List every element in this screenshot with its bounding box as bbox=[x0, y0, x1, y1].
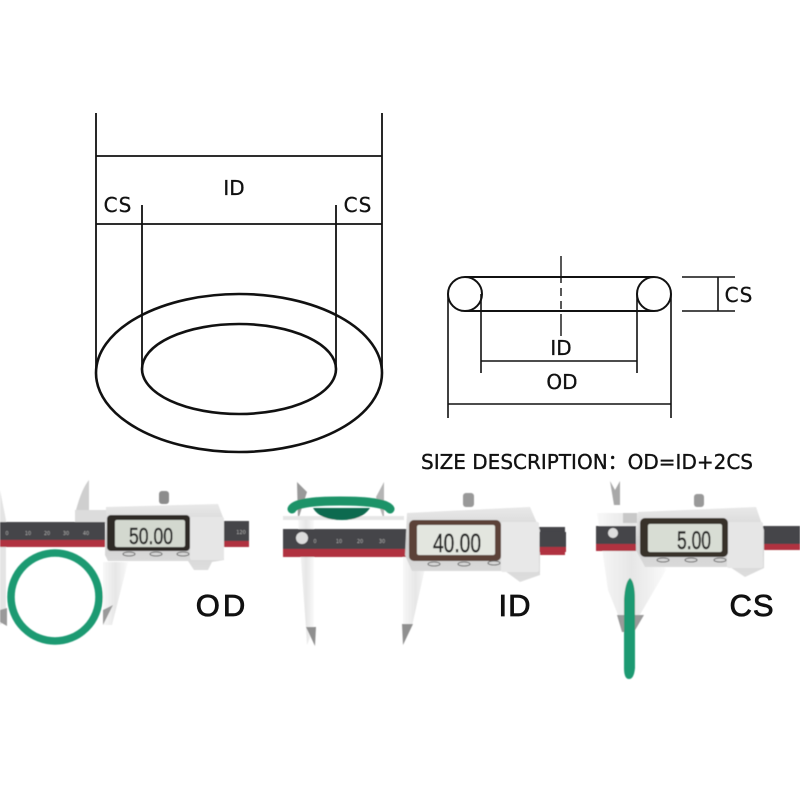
caliper body bbox=[405, 507, 540, 582]
CS dimension bbox=[682, 277, 735, 311]
scale bar bbox=[596, 526, 636, 544]
buttons bbox=[657, 558, 726, 562]
photo: OD caliper bbox=[0, 480, 249, 641]
diagram: large o-ring front view bbox=[96, 113, 382, 452]
dimension lines bbox=[96, 156, 382, 224]
label: left CS: CS bbox=[104, 193, 132, 217]
photo: OD caliper: 10 bbox=[25, 531, 31, 537]
photo: ID caliper: 0 bbox=[313, 539, 317, 545]
label: OD: OD bbox=[196, 588, 248, 623]
knob bbox=[463, 493, 474, 507]
photo: ID caliper: 20 bbox=[357, 539, 363, 545]
photo: CS caliper: 5.00 bbox=[677, 527, 711, 555]
dashed centre line bbox=[560, 256, 562, 336]
photo: OD caliper: 20 bbox=[44, 531, 50, 537]
left section circle bbox=[448, 277, 482, 311]
caliper body bbox=[105, 504, 224, 570]
green o-ring edge-on bbox=[624, 578, 635, 679]
label: side CS: CS bbox=[725, 283, 753, 307]
label: ID large diagram: ID bbox=[223, 176, 245, 200]
knob bbox=[159, 491, 169, 504]
label: side OD: OD bbox=[546, 370, 578, 394]
photo: OD caliper: 50.00 bbox=[129, 523, 173, 549]
scale bar bbox=[283, 529, 408, 549]
screen bbox=[640, 518, 728, 557]
label: side ID: ID bbox=[550, 336, 572, 360]
screen bbox=[409, 520, 501, 561]
outer ring ellipse bbox=[96, 294, 382, 452]
inner ring ellipse bbox=[142, 324, 336, 414]
jaws bbox=[610, 481, 620, 505]
photo: CS caliper bbox=[540, 481, 800, 679]
right section circle bbox=[637, 277, 671, 311]
buttons bbox=[123, 552, 189, 556]
buttons bbox=[428, 561, 500, 566]
photo: OD caliper: 0 bbox=[5, 531, 9, 537]
screen bbox=[107, 515, 190, 551]
jaws bbox=[297, 482, 307, 520]
knob bbox=[694, 494, 704, 507]
photo: ID caliper bbox=[283, 482, 565, 646]
size description formula: SIZE DESCRIPTION：OD=ID+2CS bbox=[421, 450, 753, 474]
photo: ID caliper: 30 bbox=[379, 539, 385, 545]
OD dimension bbox=[448, 294, 671, 418]
scale bar bbox=[0, 522, 105, 540]
label: right CS: CS bbox=[344, 193, 372, 217]
inner diameter extension lines bbox=[142, 205, 336, 369]
photo: ID caliper: 40.00 bbox=[433, 528, 481, 558]
green o-ring bbox=[292, 501, 390, 509]
jaws bbox=[0, 490, 6, 625]
photo: OD caliper: 120 bbox=[236, 530, 246, 536]
top and bottom ring edges bbox=[465, 277, 654, 311]
ID dimension bbox=[481, 294, 637, 373]
photo: OD caliper: 30 bbox=[63, 531, 69, 537]
outer diameter extension lines bbox=[96, 113, 382, 373]
label: ID: ID bbox=[498, 588, 532, 623]
photo: OD caliper: 40 bbox=[83, 531, 89, 537]
green o-ring bbox=[11, 553, 99, 641]
caliper body bbox=[636, 507, 764, 577]
photo: ID caliper: 10 bbox=[336, 539, 342, 545]
label: CS: CS bbox=[729, 588, 775, 623]
diagram: o-ring side section bbox=[448, 256, 735, 418]
